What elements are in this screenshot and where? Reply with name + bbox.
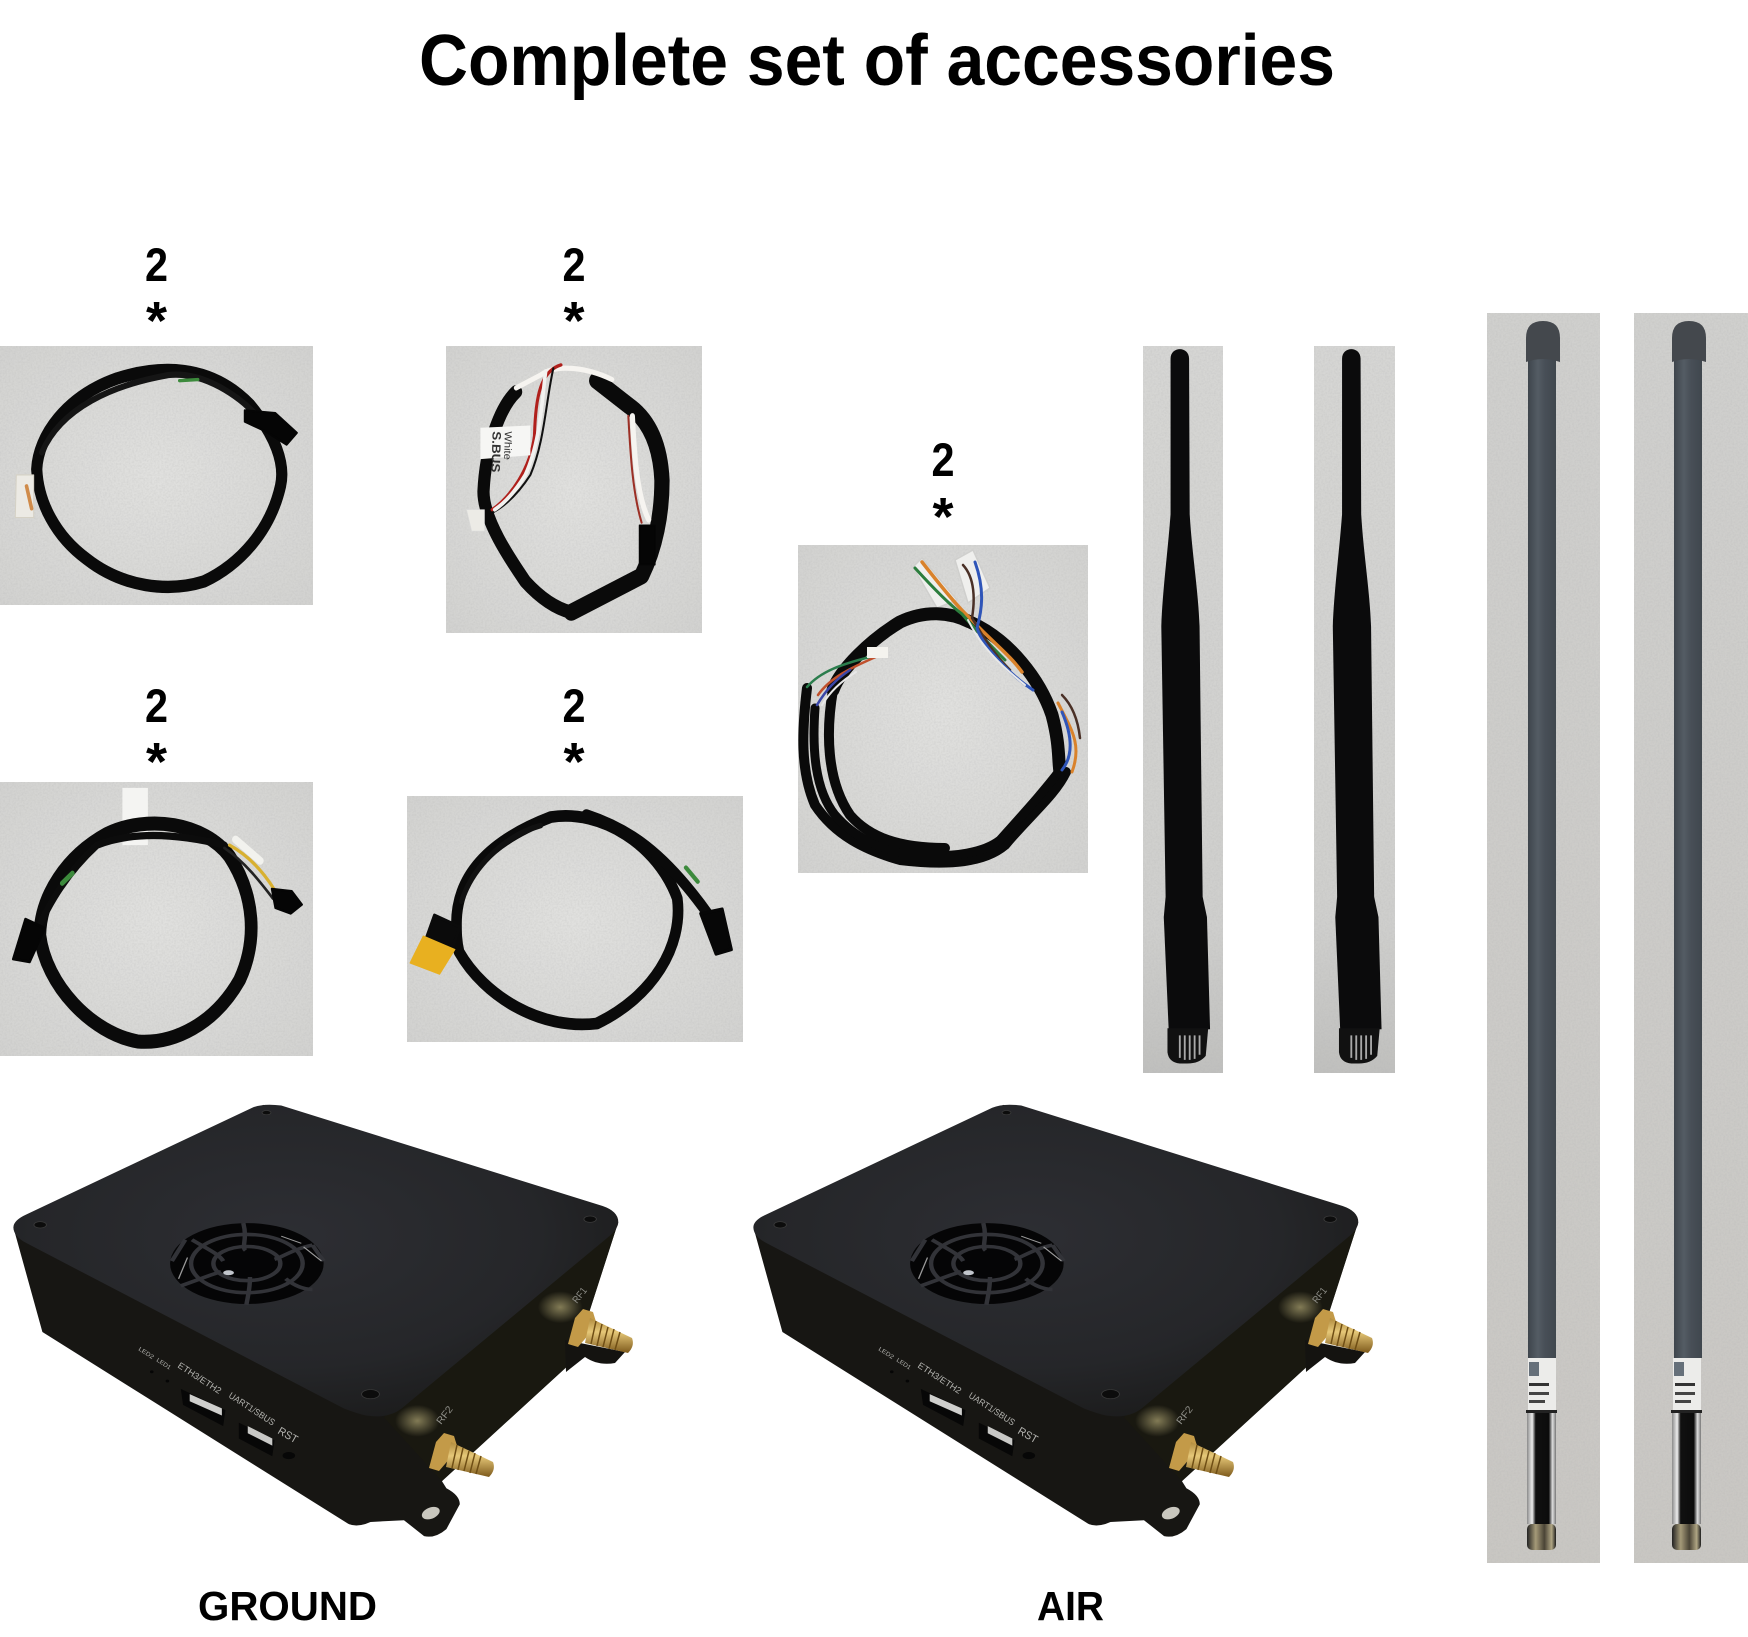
- quantity label: cable 2: *: [563, 291, 585, 351]
- brass nut: [1672, 1524, 1701, 1550]
- brass nut: [1527, 1524, 1556, 1550]
- rubber cap: [1526, 321, 1560, 362]
- rod: [1674, 350, 1702, 1358]
- reset hole: [283, 1452, 295, 1459]
- flange hole: [419, 1504, 443, 1522]
- panel: short antenna 1: [1143, 346, 1223, 1073]
- cable ring: [40, 823, 251, 1042]
- cable tail: [586, 815, 709, 915]
- panel: cable with RJ45 plug: [0, 346, 313, 605]
- UART port: [239, 1423, 275, 1456]
- small white connector: [867, 647, 888, 658]
- barrel plug: [701, 909, 731, 954]
- top face: [753, 1105, 1358, 1416]
- light reflections: [395, 1291, 583, 1437]
- green tag: [62, 873, 72, 883]
- screws: [774, 1111, 1336, 1399]
- rod: [1528, 350, 1556, 1358]
- black plug: [640, 525, 655, 565]
- caption: air: AIR: [1037, 1583, 1104, 1629]
- fan grille: [170, 1223, 324, 1305]
- quantity label: cable 4: 2: [562, 679, 586, 732]
- title: Complete set of accessories: [419, 21, 1335, 101]
- RJ45 plug left: [913, 558, 957, 608]
- port labels: LED1: [155, 1358, 172, 1372]
- braided strand C: [829, 690, 945, 848]
- quantity label: cable 5: 2: [932, 433, 954, 486]
- wire label tag: [480, 426, 530, 473]
- ETH port: [921, 1389, 965, 1426]
- quantity label: cable 4: *: [563, 732, 585, 792]
- knurled nut: [1339, 1028, 1380, 1063]
- wire label tag: White: [501, 431, 513, 460]
- port labels: UART1/SBUS: [967, 1390, 1017, 1428]
- screws: [34, 1111, 596, 1399]
- quantity label: cable 2: [562, 238, 586, 351]
- antenna whip and base: [1333, 349, 1382, 1030]
- cable ring: [456, 816, 678, 1024]
- RF2 gold connector: [1169, 1433, 1234, 1477]
- braided strand B: [814, 708, 1060, 856]
- RF2 gold connector: [429, 1433, 494, 1477]
- wire label tag: S.BUS: [488, 431, 504, 473]
- light reflections: [1135, 1291, 1323, 1437]
- port labels: RF2: [435, 1404, 456, 1427]
- enclosure body: [753, 1105, 1358, 1537]
- white spec label: [1673, 1358, 1701, 1410]
- top face: [13, 1105, 618, 1416]
- white label: [122, 788, 148, 845]
- quantity label: cable 2: 2: [562, 238, 586, 291]
- braided top and right arc: [833, 614, 1060, 772]
- port labels: [137, 1285, 590, 1446]
- RJ45 plug right: [955, 550, 990, 603]
- quantity label: cable 1: [145, 238, 168, 351]
- reset hole: [1023, 1452, 1035, 1459]
- quantity label: cable 5: [932, 433, 954, 547]
- fan grille: [910, 1223, 1064, 1305]
- UART port: [979, 1423, 1015, 1456]
- port labels: [877, 1285, 1330, 1446]
- device: ground unit: [13, 1105, 633, 1537]
- right white wire: [632, 416, 649, 520]
- device: air unit: [753, 1105, 1373, 1537]
- green tag: [686, 868, 698, 882]
- port labels: ETH3/ETH2: [916, 1360, 963, 1396]
- panel: power cable with yellow XT connector: [407, 796, 743, 1042]
- port labels: ETH3/ETH2: [176, 1360, 223, 1396]
- flat black sleeve left: [483, 392, 571, 612]
- quantity label: cable 3: *: [146, 732, 167, 792]
- quantity label: cable 5: *: [932, 487, 954, 547]
- quantity label: cable 3: 2: [145, 679, 168, 732]
- panel: twisted ethernet cable: [798, 545, 1088, 873]
- RF1 gold connector: [565, 1309, 633, 1372]
- antenna whip and base: [1161, 349, 1210, 1030]
- quantity label: cable 1: *: [146, 291, 167, 351]
- RJ45 plug: [15, 475, 34, 518]
- yellow and black wires: [230, 845, 278, 896]
- port labels: UART1/SBUS: [227, 1390, 277, 1428]
- knurled nut: [1167, 1028, 1208, 1063]
- XT connector black boot: [426, 915, 460, 949]
- white spec label: [1528, 1358, 1556, 1410]
- second strand: [42, 375, 260, 452]
- port labels: LED1: [895, 1358, 912, 1372]
- flat black sleeve right: [571, 381, 662, 612]
- white wire down left: [495, 371, 546, 510]
- status LEDs: [150, 1370, 169, 1382]
- dual black plug: [272, 889, 302, 914]
- red wire: [492, 365, 561, 510]
- panel: long fiberglass antenna 2: [1634, 313, 1748, 1563]
- left wires: [807, 655, 878, 687]
- second strand: [31, 836, 224, 946]
- panel: cable with dual plugs: [0, 782, 313, 1056]
- small white connector: [467, 510, 484, 531]
- black connector: [245, 410, 297, 445]
- port labels: RF2: [1175, 1404, 1196, 1427]
- port labels: RST: [276, 1425, 300, 1446]
- enclosure body: [13, 1105, 618, 1537]
- white wire top: [516, 368, 612, 388]
- quantity label: cable 1: 2: [145, 238, 168, 291]
- right wires: [922, 562, 1022, 672]
- rubber cap: [1672, 321, 1706, 362]
- ETH port: [181, 1389, 225, 1426]
- port labels: RF1: [1311, 1285, 1330, 1306]
- right side wall: [1124, 1222, 1358, 1481]
- flange hole: [1159, 1504, 1183, 1522]
- chrome ferrule: [1527, 1412, 1556, 1524]
- braided strand A: [803, 688, 1066, 863]
- port labels: LED2: [137, 1347, 155, 1361]
- RF1 gold connector: [1305, 1309, 1373, 1372]
- status LEDs: [890, 1370, 909, 1382]
- panel: short antenna 2: [1314, 346, 1395, 1073]
- panel: S.BUS cable: [446, 346, 702, 633]
- port labels: LED2: [877, 1347, 895, 1361]
- black wire: [494, 368, 553, 512]
- port labels: RST: [1016, 1425, 1040, 1446]
- green tag: [180, 380, 198, 381]
- caption: ground: GROUND: [198, 1583, 377, 1629]
- barrel plug: [13, 919, 45, 962]
- port labels: RF1: [571, 1285, 590, 1306]
- right side wall: [384, 1222, 618, 1481]
- quantity label: cable 4: [562, 679, 586, 792]
- quantity label: cable 3: [145, 679, 168, 792]
- XT connector yellow body: [410, 936, 455, 974]
- cable ring: [37, 370, 282, 587]
- panel: long fiberglass antenna 1: [1487, 313, 1600, 1563]
- chrome ferrule: [1672, 1412, 1701, 1524]
